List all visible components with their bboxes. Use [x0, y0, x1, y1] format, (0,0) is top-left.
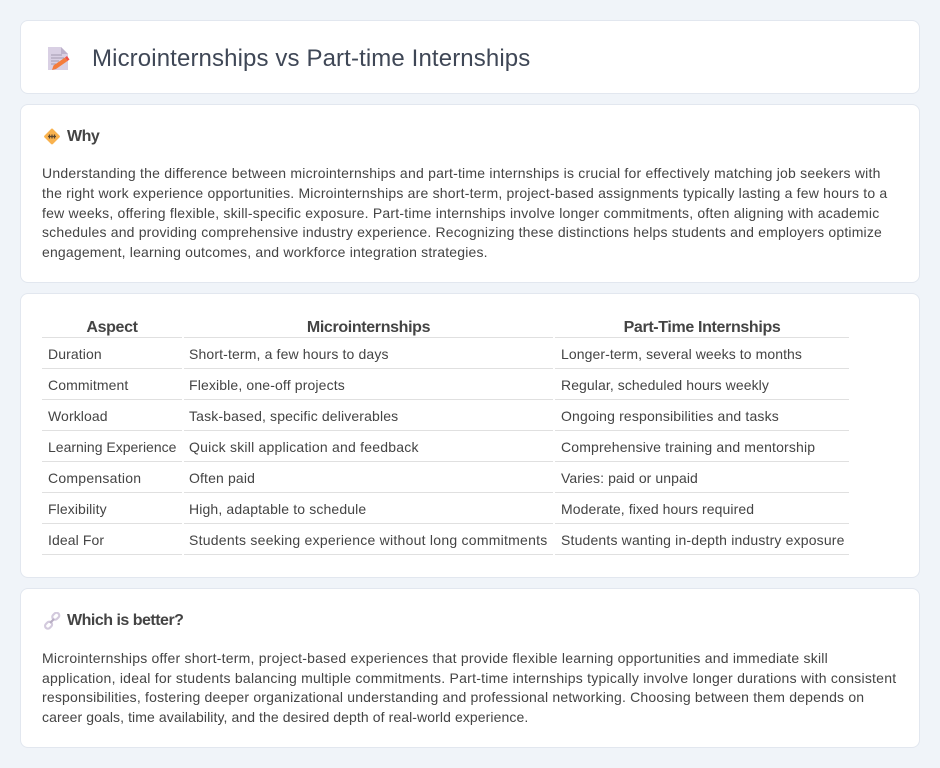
comparison table: Ideal For — [48, 532, 104, 548]
panel: why — [20, 104, 920, 283]
comparison table: Learning Experience — [48, 439, 176, 455]
header card — [20, 20, 920, 94]
comparison table: Workload — [48, 408, 108, 424]
icon: diamond sign — [44, 128, 60, 144]
text: which is better paragraph: responsibilities, fostering deeper organizational understanding and professional networking. Choosing between them depends on — [42, 689, 864, 705]
comparison table — [42, 319, 849, 555]
text: why paragraph: engagement, learning outcomes, and workforce integration strategies. — [42, 244, 488, 260]
text: why paragraph: schedules and providing comprehensive industry experience. Recognizing these distinctions helps students and employers optimize — [42, 224, 882, 240]
comparison table: Comprehensive training and mentorship — [561, 439, 815, 455]
icon: chain link — [44, 612, 60, 630]
comparison table: Short-term, a few hours to days — [189, 346, 389, 362]
heading: which is better: Which is better? — [67, 612, 183, 629]
icon: document with pencil — [48, 47, 70, 70]
comparison table: Aspect — [86, 319, 138, 336]
comparison table: Task-based, specific deliverables — [189, 408, 398, 424]
text: which is better paragraph — [42, 650, 896, 725]
text: why paragraph — [42, 165, 888, 260]
text: which is better paragraph: application, ideal for students balancing multiple commitments. Part-time internships typically involve longer durations with consistent — [42, 670, 896, 686]
comparison table: Moderate, fixed hours required — [561, 501, 754, 517]
panel: which is better — [20, 588, 920, 748]
comparison table: Flexible, one-off projects — [189, 377, 345, 393]
comparison table: Often paid — [189, 470, 255, 486]
comparison table: Part-Time Internships — [624, 319, 780, 336]
comparison table: Students wanting in-depth industry exposure — [561, 532, 845, 548]
heading: why: Why — [67, 128, 99, 145]
comparison table: Flexibility — [48, 501, 107, 517]
panel: comparison table — [20, 293, 920, 578]
comparison table: Duration — [48, 346, 102, 362]
text: which is better paragraph: Microinternships offer short-term, project-based experiences that provide flexible learning opportunities and immediate skill — [42, 650, 828, 666]
comparison table: Microinternships — [307, 319, 430, 336]
comparison table: Longer-term, several weeks to months — [561, 346, 802, 362]
comparison table: Students seeking experience without long commitments — [189, 532, 548, 548]
title: Microinternships vs Part-time Internships — [92, 45, 530, 72]
comparison table: Compensation — [48, 470, 141, 486]
text: why paragraph: the right work experience opportunities. Microinternships are short-term, project-based assignments typically lasting a few hours to a — [42, 185, 887, 201]
comparison table: Varies: paid or unpaid — [561, 470, 698, 486]
text: why paragraph: few weeks, offering flexible, skill-specific exposure. Part-time internships involve longer commitments, often aligning with academic — [42, 205, 879, 221]
comparison table: Quick skill application and feedback — [189, 439, 419, 455]
text: which is better paragraph: career goals, time availability, and the desired depth of real-world experience. — [42, 709, 528, 725]
text: why paragraph: Understanding the difference between microinternships and part-time internships is crucial for effectively matching job seekers with — [42, 165, 881, 181]
comparison table: Regular, scheduled hours weekly — [561, 377, 769, 393]
comparison table: High, adaptable to schedule — [189, 501, 366, 517]
comparison table: Ongoing responsibilities and tasks — [561, 408, 779, 424]
comparison table: Commitment — [48, 377, 128, 393]
